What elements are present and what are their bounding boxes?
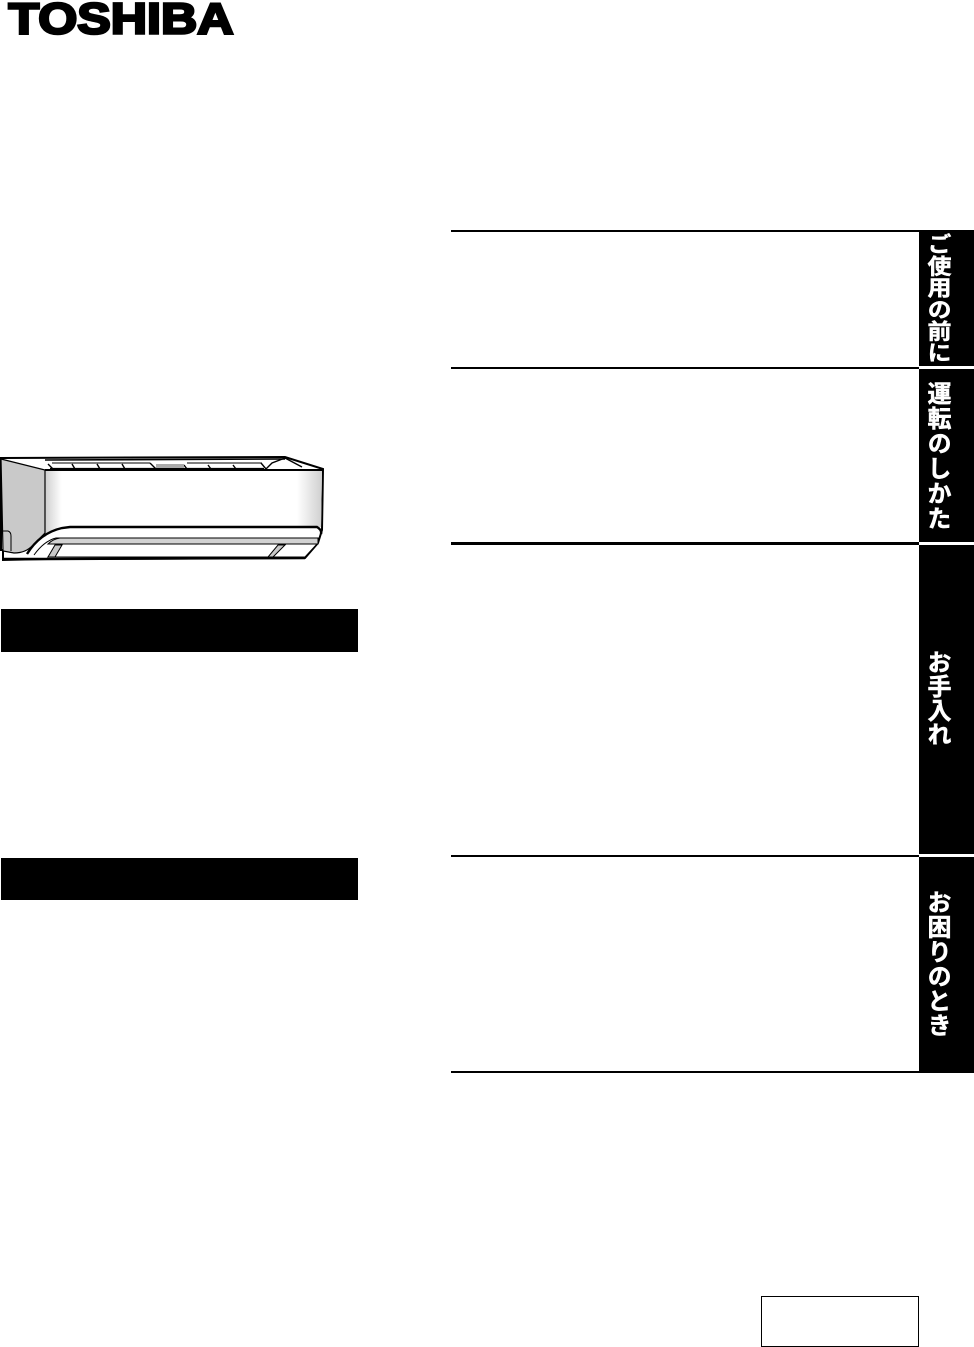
black band 1 xyxy=(1,609,358,652)
black band 2 xyxy=(1,858,358,900)
empty box bottom right xyxy=(761,1296,919,1347)
side tab: troubleshooting xyxy=(919,857,974,1073)
illustration: wall-mounted air conditioner xyxy=(0,456,324,561)
side tab: maintenance: お手入れ xyxy=(923,650,950,746)
rule 3 xyxy=(451,542,919,545)
side tab: before use xyxy=(919,230,974,366)
side tab: troubleshooting: お困りのとき xyxy=(923,890,950,1038)
left side panel xyxy=(1,459,45,553)
side tab: how to operate xyxy=(919,369,974,542)
side tab: how to operate: 運転のしかた xyxy=(923,381,950,531)
rule 2 xyxy=(451,367,919,369)
side tab: before use: ご使用の前に xyxy=(923,233,950,363)
lower lip and louver xyxy=(3,527,321,559)
rule 1 xyxy=(451,230,919,232)
rule 5 xyxy=(451,1071,919,1073)
top vents xyxy=(45,458,323,470)
front face xyxy=(45,471,322,537)
rule 4 xyxy=(451,855,919,857)
side panel cut-out xyxy=(1,531,11,551)
unit body xyxy=(1,457,323,560)
side tab: maintenance xyxy=(919,545,974,854)
